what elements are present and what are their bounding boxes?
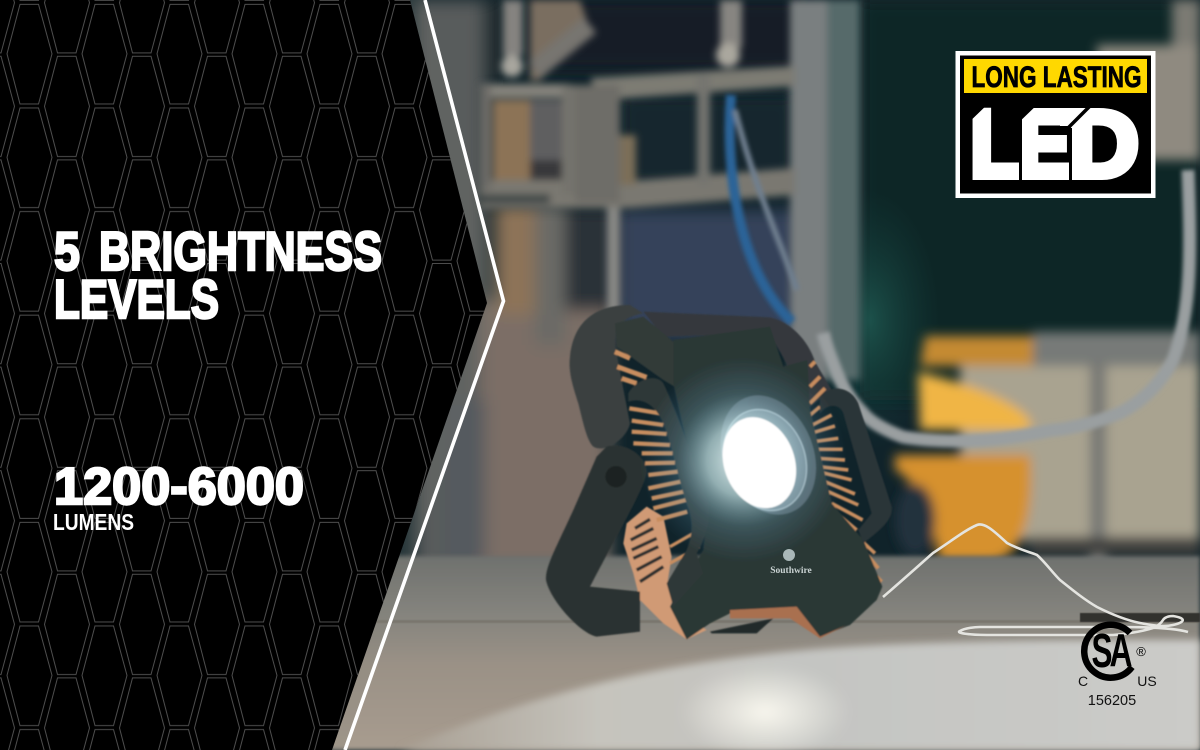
- work light product: [546, 305, 892, 639]
- lower peach fin block: [623, 507, 707, 639]
- long lasting LED badge: [956, 51, 1156, 198]
- fold-out stand: [546, 446, 647, 637]
- bottom feet: [730, 607, 847, 638]
- power cord: [883, 524, 1188, 635]
- CSA certification mark: [1078, 624, 1157, 709]
- blurred steel frame: [480, 0, 860, 380]
- CSA certification mark: US: [1137, 673, 1157, 689]
- blurred blue cable: [730, 95, 797, 322]
- blurred yellow helmet and beige shelving: [895, 0, 1200, 570]
- lens glow: [640, 357, 847, 563]
- upper diagonal arm: [615, 317, 720, 400]
- pivot knob: [605, 466, 627, 487]
- lens: [710, 407, 808, 519]
- curved conduit pipe: [823, 170, 1190, 441]
- right fins: [808, 362, 882, 582]
- CSA certification mark: C: [1078, 673, 1088, 689]
- white chevron line: [345, 0, 504, 750]
- bright light pool on floor: [400, 640, 1200, 750]
- heading: 5 brightness levels: 5: [54, 220, 80, 282]
- translucent band beside chevron: [332, 0, 505, 750]
- black left panel with hexagon pattern: [0, 0, 487, 750]
- CSA certification mark: S: [1092, 625, 1112, 678]
- Southwire logo: [770, 549, 812, 576]
- heading: 5 brightness levels: [54, 220, 382, 330]
- top handle: [643, 312, 832, 407]
- CSA certification mark: 156205: [1088, 693, 1136, 709]
- lumens range: 1200-6000: [54, 458, 304, 516]
- lumens range: LUMENS: [53, 509, 134, 535]
- CSA certification mark: ®: [1136, 644, 1146, 659]
- rear bumper: [570, 305, 643, 448]
- LED wordmark: D: [1068, 92, 1139, 198]
- slots in peach block: [631, 519, 663, 582]
- LED wordmark: [962, 92, 1139, 198]
- left fins over spine: [629, 408, 704, 585]
- lens inner ring: [710, 398, 820, 522]
- heading: 5 brightness levels: BRIGHTNESS: [99, 220, 382, 282]
- floor: [330, 556, 1200, 750]
- handle opening: [677, 340, 730, 363]
- lens outer ring: [704, 381, 833, 529]
- heading: 5 brightness levels: LEVELS: [54, 268, 219, 330]
- main body: [670, 327, 882, 639]
- right side arm: [820, 389, 892, 543]
- LED wordmark: E: [1019, 92, 1071, 198]
- CSA certification mark: A: [1110, 624, 1132, 676]
- LED wordmark: L: [970, 92, 1022, 198]
- orange fins upper left: [615, 352, 647, 383]
- left front arm: [628, 378, 709, 607]
- dark tool on floor: [1080, 613, 1200, 622]
- badge label: LONG LASTING: [972, 61, 1142, 94]
- Southwire logo: Southwire: [770, 566, 812, 576]
